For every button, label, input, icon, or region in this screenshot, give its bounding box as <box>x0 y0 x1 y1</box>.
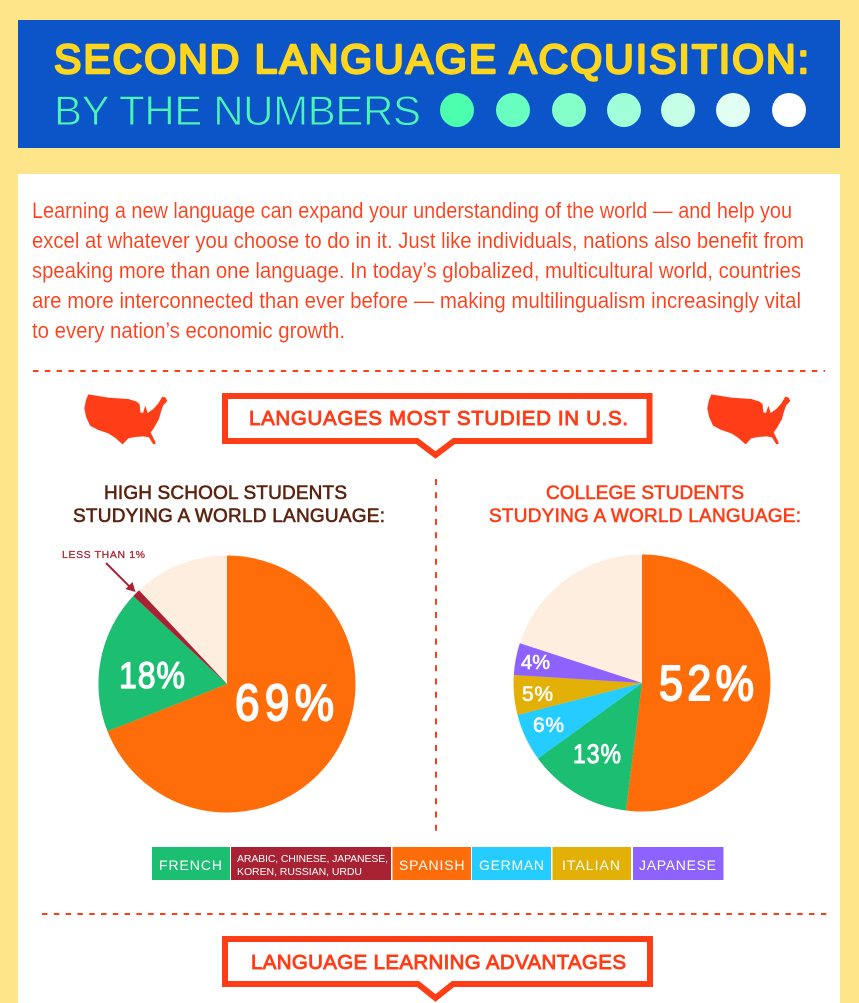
annotation: less than 1% <box>62 549 145 592</box>
pie chart: high school <box>98 556 356 812</box>
heading: high school students: STUDYING A WORLD LANGUAGE: <box>73 506 385 527</box>
heading: high school students: HIGH SCHOOL STUDENTS <box>104 483 347 504</box>
title banner <box>18 20 840 148</box>
title: main heading: SECOND LANGUAGE ACQUISITION: <box>54 36 809 82</box>
annotation: less than 1%: LESS THAN 1% <box>62 549 145 561</box>
callout heading: language learning advantages: LANGUAGE LEARNING ADVANTAGES <box>251 951 626 974</box>
pie chart: college: 13% <box>573 741 621 769</box>
pie chart: college <box>514 554 770 812</box>
intro paragraph: Learning a new language can expand your understanding of the world — and help you <box>32 198 792 223</box>
icon: US map left <box>84 394 167 444</box>
heading: college students <box>489 483 801 527</box>
callout heading: languages most studied <box>225 396 650 455</box>
heading: high school students <box>73 483 385 527</box>
legend: GERMAN <box>479 857 544 873</box>
intro paragraph: to every nation’s economic growth. <box>32 318 345 343</box>
pie chart: high school: 69% <box>235 675 334 732</box>
white content panel <box>18 174 840 1003</box>
legend: ARABIC, CHINESE, JAPANESE, <box>237 853 388 865</box>
pie chart: college: 4% <box>521 652 550 674</box>
legend: KOREN, RUSSIAN, URDU <box>237 866 362 878</box>
intro paragraph: are more interconnected than ever before — making multilingualism increasingly vital <box>32 288 801 313</box>
subtitle: BY THE NUMBERS <box>54 87 421 134</box>
intro paragraph <box>32 198 804 343</box>
legend: SPANISH <box>399 857 464 873</box>
intro paragraph: excel at whatever you choose to do in it. Just like individuals, nations also benefit from <box>32 228 804 253</box>
heading: college students: COLLEGE STUDENTS <box>546 483 744 504</box>
pie chart: high school: 18% <box>119 656 185 697</box>
callout heading: languages most studied: LANGUAGES MOST STUDIED IN U.S. <box>249 407 628 430</box>
legend: FRENCH <box>159 857 222 873</box>
pie chart: college: 6% <box>533 714 564 737</box>
legend <box>152 847 724 880</box>
pie chart: college: 5% <box>522 683 553 706</box>
legend: JAPANESE <box>639 857 716 873</box>
decorative dot row <box>440 93 806 127</box>
callout heading: language learning advantages <box>225 939 650 998</box>
pie chart: college: 52% <box>659 655 754 711</box>
legend: ITALIAN <box>562 857 620 873</box>
intro paragraph: speaking more than one language. In today’s globalized, multicultural world, countries <box>32 258 801 283</box>
heading: college students: STUDYING A WORLD LANGUAGE: <box>489 506 801 527</box>
icon: US map right <box>707 394 790 444</box>
